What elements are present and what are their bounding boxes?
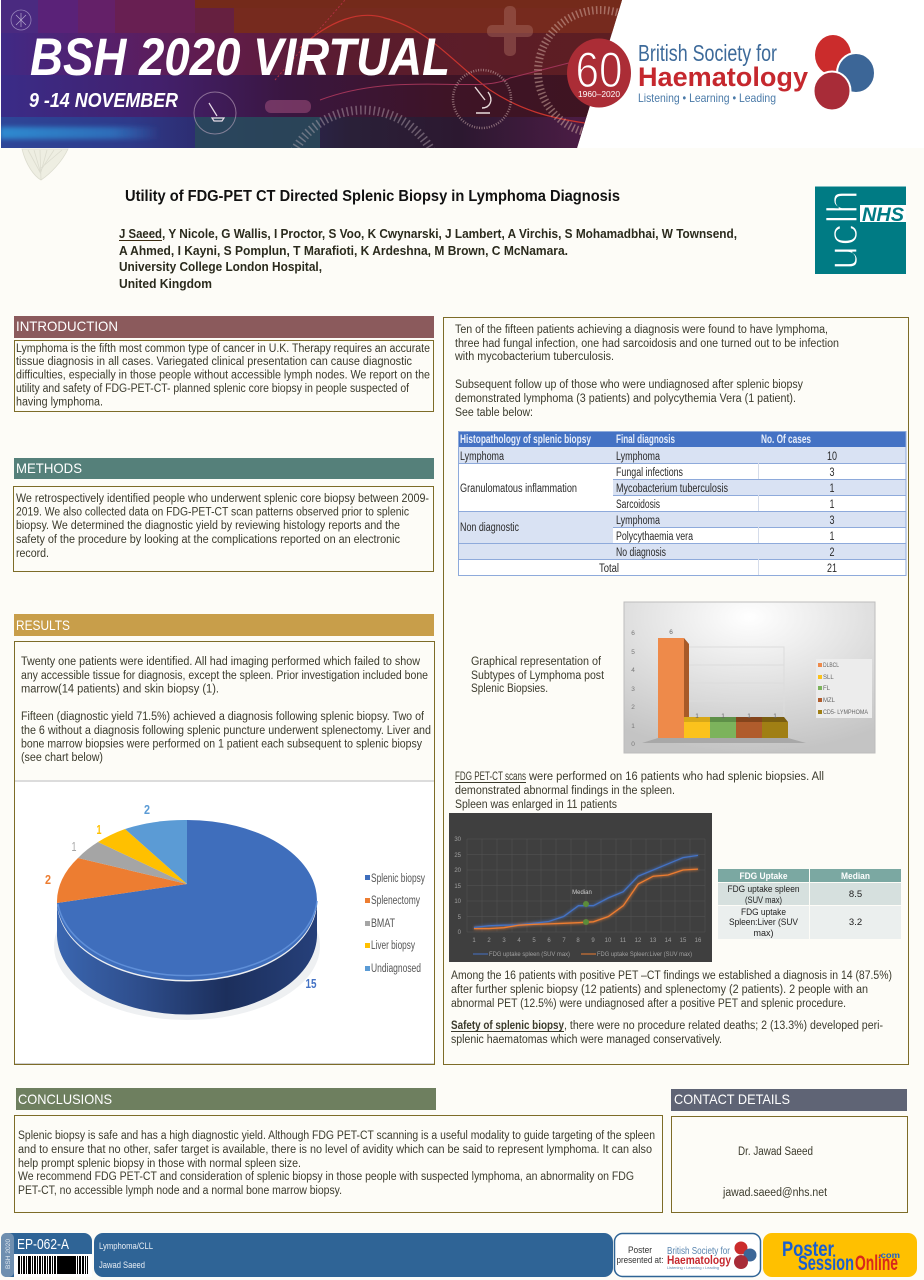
- footer: PosterSessionOnline logo: [763, 1233, 917, 1277]
- panel: results: Twenty one patients were identified. All had imaging performed which failed to show: [21, 656, 421, 668]
- chart: FDG uptake lines: 4: [517, 938, 521, 944]
- chart: 3D bars of lymphoma subtypes: 0: [631, 741, 635, 748]
- British Society for Haematology logo: [638, 35, 875, 110]
- panel: methods: 2019. We also collected data on FDG-PET-CT scan patterns observed prior to splenic: [16, 506, 409, 518]
- pie legend: BMAT: [371, 918, 395, 930]
- chart: FDG uptake lines: 25: [454, 853, 462, 859]
- table: FDG uptake medians: 8.5: [849, 889, 862, 900]
- icon: microscope ring: [453, 70, 511, 128]
- authors and affiliation: United Kingdom: [119, 276, 212, 291]
- table: histopathology and final diagnosis: Sarcoidosis: [616, 499, 660, 511]
- subtype legend: DLBCL: [823, 663, 840, 669]
- chart: pie of diagnostic route: 2: [45, 872, 51, 887]
- chart: FDG uptake lines: 5: [532, 938, 536, 944]
- authors and affiliation: [119, 226, 737, 291]
- chart: FDG uptake lines: 1: [472, 938, 476, 944]
- panel: conclusions: help prompt splenic biopsy in those with normal spleen size.: [18, 1158, 301, 1170]
- chart: 3D bars of lymphoma subtypes: 6: [669, 629, 673, 636]
- table: histopathology and final diagnosis: No diagnosis: [616, 547, 666, 559]
- footer: poster presented at: [614, 1234, 760, 1276]
- chart: 3D bars of lymphoma subtypes: 1: [721, 713, 725, 720]
- decorative feather: [22, 149, 68, 180]
- pie legend: Liver biopsy: [371, 940, 415, 952]
- pie legend: Splenectomy: [371, 895, 420, 907]
- chart: FDG uptake lines: 20: [454, 868, 462, 874]
- pie legend: [365, 873, 425, 975]
- chart: 3D bars of lymphoma subtypes: 6: [631, 630, 635, 637]
- table: histopathology and final diagnosis: 1: [830, 531, 834, 543]
- table: histopathology and final diagnosis: Granulomatous inflammation: [460, 483, 577, 495]
- text: PET findings and safety: Among the 16 patients with positive PET –CT findings we established a diagnosis in 14 (87.5%): [451, 970, 892, 982]
- chart: 3D bars of lymphoma subtypes: 1: [695, 713, 699, 720]
- panel: conclusions: [14, 1088, 662, 1212]
- heading: methods: [14, 458, 434, 479]
- table: FDG uptake medians: FDG uptake: [741, 907, 786, 918]
- panel: results continued: with mycobacterium tuberculosis.: [454, 351, 614, 363]
- panel: results continued: three had fungal infection, one had sarcoidosis and one turned out to be infection: [455, 338, 839, 350]
- icon: pipette ring: [194, 92, 236, 134]
- text: PET findings and safety: [451, 970, 892, 1046]
- text: PET findings and safety: , there were no procedure related deaths; 2 (13.3%) developed peri-: [564, 1020, 883, 1032]
- table: histopathology and final diagnosis: Lymphoma: [616, 515, 660, 527]
- panel: results continued: [444, 318, 908, 1064]
- text: FDG PET-CT scans: Spleen was enlarged in 11 patients: [455, 799, 617, 811]
- panel: results: Fifteen (diagnostic yield 71.5%) achieved a diagnosis following splenic biopsy. Two of: [21, 711, 425, 723]
- footer: PosterSessionOnline logo: Online: [855, 1252, 898, 1275]
- footer: topic and author: Lymphoma/CLL: [99, 1241, 153, 1252]
- chart: FDG uptake lines: 2: [487, 938, 491, 944]
- text: FDG PET-CT scans: [455, 771, 824, 811]
- table: histopathology and final diagnosis: 1: [830, 499, 834, 511]
- poster title: Utility of FDG-PET CT Directed Splenic Biopsy in Lymphoma Diagnosis: [125, 188, 620, 205]
- decorative pill: [265, 100, 311, 113]
- UCLH NHS logo: [815, 186, 906, 274]
- panel: results: the 6 without a diagnosis following splenic puncture underwent splenectomy. Liver and: [21, 725, 431, 737]
- authors and affiliation: , Y Nicole, G Wallis, I Proctor, S Voo, K Cwynarski, J Lambert, A Virchis, S Mohamadbhai, W Townsend,: [162, 226, 737, 241]
- panel: results continued: demonstrated lymphoma (3 patients) and polycythemia Vera (1 patient).: [455, 393, 796, 405]
- heading: introduction: [14, 316, 434, 338]
- heading: contact details: [671, 1089, 907, 1111]
- panel: contact details: [671, 1089, 908, 1212]
- chart: 3D bars of lymphoma subtypes: 3: [631, 686, 635, 693]
- chart: 3D bars of lymphoma subtypes: 4: [631, 667, 635, 674]
- panel: results: [14, 614, 434, 1064]
- table: histopathology and final diagnosis: Lymphoma: [616, 451, 660, 463]
- panel: results: marrow(14 patients) and skin biopsy (1).: [21, 684, 219, 696]
- banner: BSH 2020 Virtual: [1, 0, 622, 148]
- chart: FDG uptake lines: 15: [454, 884, 462, 890]
- subtype legend: CD5- LYMPHOMA: [823, 710, 868, 716]
- footer: PosterSessionOnline logo: .com: [878, 1251, 900, 1260]
- table: histopathology and final diagnosis: Non diagnostic: [460, 522, 519, 534]
- footer: poster ID and barcode: [1, 1233, 92, 1277]
- icon: molecule ring: [11, 10, 31, 30]
- caption: subtypes chart: [471, 656, 605, 695]
- panel: results continued: Subsequent follow up of those who were undiagnosed after splenic biopsy: [455, 379, 803, 391]
- text: PET findings and safety: Safety of splenic biopsy: [451, 1020, 565, 1032]
- panel: results: (see chart below): [21, 752, 103, 764]
- chart: FDG uptake lines: Median: [572, 890, 592, 896]
- chart: FDG uptake lines: 3: [502, 938, 506, 944]
- footer: PosterSessionOnline logo: Poster: [782, 1238, 834, 1261]
- panel: results continued: Ten of the fifteen patients achieving a diagnosis were found to have lymphoma,: [455, 324, 828, 336]
- icon: plus sign: [487, 6, 533, 56]
- text: FDG PET-CT scans: were performed on 16 patients who had splenic biopsies. All: [528, 771, 824, 783]
- text: FDG PET-CT scans: FDG PET-CT scans: [455, 771, 526, 783]
- heading: conclusions: [16, 1088, 436, 1110]
- chart: 3D bars of lymphoma subtypes: 1: [773, 713, 777, 720]
- panel: results: bone marrow biopsies were performed on 1 patient each subsequent to splenic biopsy: [21, 738, 422, 750]
- footer: poster presented at: presented at:: [616, 1255, 664, 1265]
- panel: methods: record.: [16, 548, 49, 560]
- heading: introduction: INTRODUCTION: [16, 318, 118, 334]
- British Society for Haematology logo: Listening • Learning • Leading: [638, 91, 776, 105]
- subtype legend: FL: [823, 686, 831, 692]
- pie legend: Splenic biopsy: [371, 873, 425, 885]
- chart: pie of diagnostic route: 2: [144, 802, 150, 817]
- panel: conclusions: We recommend FDG PET-CT and consideration of splenic biopsy in those people with suspected lymphoma, an abnormality on FDG: [18, 1171, 634, 1183]
- table: histopathology and final diagnosis: No. Of cases: [761, 434, 811, 446]
- line chart legend: FDG uptake Spleen:Liver (SUV max): [597, 952, 692, 958]
- chart: FDG uptake lines: 7: [562, 938, 566, 944]
- panel: methods: We retrospectively identified people who underwent splenic core biopsy between 2009-: [16, 493, 429, 505]
- table: histopathology and final diagnosis: 3: [830, 515, 834, 527]
- chart: pie of diagnostic route: 1: [72, 839, 76, 854]
- panel: conclusions: PET-CT, no accessible lymph node and a normal bone marrow biopsy.: [18, 1185, 342, 1197]
- icon: dashed dial right: [534, 6, 618, 135]
- chart: FDG uptake lines: 9: [591, 938, 595, 944]
- panel: methods: safety of the procedure by looking at the complications reported on an electronic: [16, 534, 400, 546]
- table: histopathology and final diagnosis: 10: [827, 451, 837, 463]
- panel: conclusions: Splenic biopsy is safe and has a high diagnostic yield. Although FDG PET-CT scanning is a useful modality to guide targeting of the spleen: [18, 1130, 655, 1142]
- footer: PosterSessionOnline logo: Session: [798, 1252, 854, 1275]
- text: PET findings and safety: splenic haematomas which were managed conservatively.: [451, 1034, 722, 1046]
- pie legend: Undiagnosed: [371, 963, 421, 975]
- British Society for Haematology logo: British Society for: [638, 40, 777, 66]
- table: FDG uptake medians: max): [754, 928, 774, 939]
- panel: introduction: tissue diagnosis in all cases. Variegated clinical presentation can cause diagnostic: [16, 356, 412, 368]
- icon: dashed dial bottom: [291, 106, 435, 148]
- panel: methods: biopsy. We determined the diagnostic yield by reviewing histology reports and the: [16, 520, 400, 532]
- panel: introduction: [14, 316, 434, 412]
- table: FDG uptake medians: 3.2: [849, 917, 862, 928]
- table: FDG uptake medians: FDG Uptake: [740, 871, 788, 882]
- chart: pie of diagnostic route: 1: [96, 822, 102, 837]
- chart: FDG uptake lines: 14: [665, 938, 672, 944]
- panel: contact details: jawad.saeed@nhs.net: [722, 1187, 828, 1199]
- heading: contact details: CONTACT DETAILS: [674, 1091, 790, 1107]
- chart: 3D bars of lymphoma subtypes: 1: [747, 713, 751, 720]
- table: histopathology and final diagnosis: 2: [830, 547, 834, 559]
- footer: poster presented at: Haematology: [667, 1253, 731, 1267]
- subtype legend: SLL: [823, 675, 834, 681]
- chart: FDG uptake lines: [449, 813, 712, 962]
- caption: subtypes chart: Splenic Biopsies.: [471, 683, 548, 695]
- footer: poster presented at: British Society for: [667, 1246, 731, 1257]
- text: FDG PET-CT scans: demonstrated abnormal findings in the spleen.: [455, 785, 675, 797]
- panel: introduction: difficulties, especially in those people without accessible lymph nodes. We report on the: [16, 370, 430, 382]
- table: histopathology and final diagnosis: Polycythaemia vera: [616, 531, 693, 543]
- table: FDG uptake medians: Spleen:Liver (SUV: [729, 917, 799, 928]
- line chart legend: [473, 952, 692, 958]
- authors and affiliation: University College London Hospital,: [119, 259, 322, 274]
- panel: results: any accessible tissue for diagnosis, except the spleen. Prior investigation included bone: [21, 670, 428, 682]
- footer: poster presented at: Listening • Learning • Leading: [667, 1265, 719, 1270]
- line chart legend: FDG uptake spleen (SUV max): [489, 952, 570, 958]
- table: histopathology and final diagnosis: Total: [599, 563, 619, 575]
- chart: 3D bars of lymphoma subtypes: [624, 602, 875, 753]
- chart: FDG uptake lines: 0: [458, 930, 462, 936]
- heading: results: [14, 614, 434, 636]
- table: histopathology and final diagnosis: Fungal infections: [616, 467, 683, 479]
- footer: poster ID and barcode: BSH 2020: [5, 1239, 12, 1269]
- subtype legend: [816, 659, 872, 718]
- panel: introduction: utility and safety of FDG-PET-CT- planned splenic core biopsy in people suspected of: [16, 383, 410, 395]
- chart: pie of diagnostic route: [14, 780, 434, 1064]
- table: histopathology and final diagnosis: Mycobacterium tuberculosis: [616, 483, 728, 495]
- chart: FDG uptake lines: 10: [454, 899, 462, 905]
- table: histopathology and final diagnosis: 3: [830, 467, 834, 479]
- chart: FDG uptake lines: 30: [454, 837, 462, 843]
- footer: poster presented at: Poster: [628, 1245, 652, 1255]
- table: histopathology and final diagnosis: Final diagnosis: [616, 434, 675, 446]
- panel: contact details: Dr. Jawad Saeed: [738, 1146, 813, 1158]
- panel: results continued: See table below:: [455, 407, 533, 419]
- chart: FDG uptake lines: 12: [635, 938, 642, 944]
- British Society for Haematology logo: Haematology: [638, 62, 808, 92]
- table: histopathology and final diagnosis: 1: [830, 483, 834, 495]
- authors and affiliation: J Saeed: [119, 226, 162, 241]
- UCLH NHS logo: uclh: [818, 190, 867, 270]
- table: histopathology and final diagnosis: Histopathology of splenic biopsy: [460, 434, 591, 446]
- chart: FDG uptake lines: 15: [680, 938, 687, 944]
- chart: FDG uptake lines: 10: [605, 938, 612, 944]
- 60th anniversary badge: 60: [576, 42, 622, 98]
- chart: 3D bars of lymphoma subtypes: 2: [631, 704, 635, 711]
- chart: FDG uptake lines: 13: [650, 938, 657, 944]
- heading: methods: METHODS: [16, 460, 82, 476]
- chart: FDG uptake lines: 11: [620, 938, 627, 944]
- caption: subtypes chart: Graphical representation of: [471, 656, 602, 668]
- panel: conclusions: and to ensure that no other, safer target is available, there is no level of avidity which can be said to represent lymphoma. It can also: [18, 1144, 652, 1156]
- table: FDG uptake medians: Median: [841, 871, 870, 882]
- footer: topic and author: Jawad Saeed: [99, 1260, 145, 1271]
- banner dates: 9 -14 NOVEMBER: [29, 90, 178, 112]
- banner title: BSH 2020 VIRTUAL: [30, 28, 450, 87]
- table: histopathology and final diagnosis: Lymphoma: [460, 451, 504, 463]
- heading: results: RESULTS: [16, 617, 70, 633]
- footer: poster ID and barcode: EP-062-A: [17, 1236, 69, 1253]
- table: histopathology and final diagnosis: [458, 431, 906, 576]
- UCLH NHS logo: NHS: [862, 205, 904, 226]
- authors and affiliation: A Ahmed, I Kayni, S Pomplun, T Marafioti, K Ardeshna, M Brown, C McNamara.: [119, 243, 568, 258]
- chart: FDG uptake lines: 5: [458, 915, 462, 921]
- table: FDG uptake medians: FDG uptake spleen: [728, 884, 800, 895]
- chart: FDG uptake lines: 8: [576, 938, 580, 944]
- table: histopathology and final diagnosis: 21: [827, 563, 837, 575]
- text: PET findings and safety: abnormal PET (12.5%) were undiagnosed after a positive PET and splenic procedure.: [451, 998, 846, 1010]
- subtype legend: MZL: [823, 698, 836, 704]
- chart: 3D bars of lymphoma subtypes: 1: [631, 723, 635, 730]
- text: PET findings and safety: after further splenic biopsy (12 patients) and splenectomy (2 patients). 2 people with an: [451, 984, 868, 996]
- chart: 3D bars of lymphoma subtypes: 5: [631, 649, 635, 656]
- panel: introduction: Lymphoma is the fifth most common type of cancer in U.K. Therapy requires an accurate: [16, 343, 430, 355]
- footer: topic and author: [94, 1233, 613, 1277]
- panel: methods: [14, 458, 434, 572]
- panel: introduction: having lymphoma.: [16, 396, 103, 408]
- chart: pie of diagnostic route: 15: [306, 976, 316, 991]
- table: FDG uptake medians: (SUV max): [745, 895, 782, 906]
- header white strip: [0, 0, 924, 148]
- 60th anniversary badge: 1960–2020: [578, 89, 620, 99]
- heading: conclusions: CONCLUSIONS: [18, 1091, 112, 1107]
- caption: subtypes chart: Subtypes of Lymphoma post: [471, 670, 605, 682]
- chart: FDG uptake lines: 16: [695, 938, 702, 944]
- chart: FDG uptake lines: 6: [547, 938, 551, 944]
- table: FDG uptake medians: [718, 869, 901, 939]
